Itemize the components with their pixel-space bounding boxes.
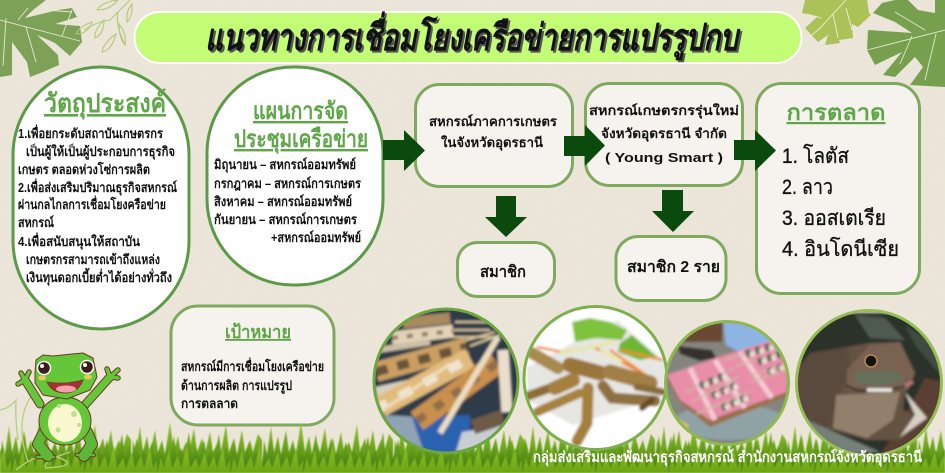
- panel: agricultural cooperatives: ในจังหวัดอุดรธานี: [441, 134, 543, 151]
- text block: objectives list: [18, 124, 177, 286]
- arrow: down to two members: [652, 190, 694, 232]
- decorative branch: top left: [76, 0, 132, 52]
- photo: frog skewers on pink mat: [665, 321, 790, 445]
- panel: agricultural cooperatives: [416, 84, 572, 186]
- photo: grilled frog skewers: [372, 308, 520, 455]
- text block: objectives list: 1.เพื่อยกระดับสถาบันเกษตรกร: [18, 124, 163, 141]
- title banner: แนวทางการเชื่อมโยงเครือข่ายการแปรรูปกบ: [205, 11, 741, 61]
- panel: Young Smart cooperative: จังหวัดอุดรธานี จำกัด: [601, 126, 727, 142]
- arrow: to marketing: [734, 130, 776, 171]
- panel: two members: สมาชิก 2 ราย: [627, 258, 720, 276]
- text block: objectives list: เป็นผู้ให้เป็นผู้ประกอบการธุรกิจ: [26, 142, 175, 160]
- heading: marketing: การตลาด: [786, 100, 886, 125]
- text block: monthly schedule: +สหกรณ์ออมทรัพย์: [271, 230, 361, 245]
- panel: two members: [616, 236, 726, 300]
- heading: meeting plan: [234, 98, 368, 155]
- text block: objectives list: เกษตรกรสามารถเข้าถึงแหล่ง: [26, 252, 160, 267]
- text block: goal: สหกรณ์มีการเชื่อมโยงเครือข่าย: [181, 357, 324, 374]
- arrow: to Young Smart cooperative: [564, 125, 605, 166]
- heading: meeting plan: แผนการจัด: [253, 98, 348, 125]
- list: markets: 1. โลตัส: [782, 144, 849, 168]
- text block: objectives list: เกษตร ตลอดห่วงโซ่การผลิต: [18, 161, 150, 177]
- decorative leaf: top right dark: [867, 0, 945, 87]
- panel: members: สมาชิก: [480, 263, 526, 281]
- title banner: [134, 11, 802, 63]
- heading: meeting plan: ประชุมเครือข่าย: [234, 126, 368, 155]
- list: markets: 4. อินโดนีเซีย: [782, 237, 899, 261]
- panel: Young Smart cooperative: [586, 84, 742, 186]
- panel: Young Smart cooperative: ( Young Smart ): [605, 150, 723, 165]
- photo: bullfrog: [795, 310, 943, 456]
- text block: monthly schedule: กรกฎาคม – สหกรณ์การเกษตร: [214, 176, 361, 192]
- list: markets: 2. ลาว: [782, 176, 833, 199]
- panel: goal: [171, 306, 334, 425]
- photo: fried frog plate: [524, 305, 668, 451]
- panel: marketing: [756, 84, 920, 294]
- text block: objectives list: 4.เพื่อสนับสนุนให้สถาบัน: [18, 232, 140, 250]
- grass: [0, 420, 945, 473]
- text block: monthly schedule: สิงหาคม – สหกรณ์ออมทรัพย์: [214, 194, 352, 209]
- text block: objectives list: เงินทุนดอกเบี้ยต่ำได้อย่างทั่วถึง: [26, 267, 172, 286]
- text block: objectives list: 2.เพื่อส่งเสริมปริมาณธุรกิจสหกรณ์: [18, 178, 177, 196]
- icon: frog mascot: [0, 353, 118, 470]
- panel: Young Smart cooperative: สหกรณ์เกษตรกรรุ่นใหม่: [589, 102, 739, 119]
- panel: objectives: [13, 67, 189, 329]
- panel: members: [458, 242, 554, 296]
- text block: goal: [181, 357, 324, 411]
- arrow: plan to agricultural cooperatives: [383, 130, 425, 171]
- text block: objectives list: ผ่านกลไกลการเชื่อมโยงครือข่าย: [18, 195, 166, 212]
- decorative leaf: top left monstera: [0, 0, 82, 77]
- heading: goal: เป้าหมาย: [225, 322, 291, 342]
- text block: goal: ด้านการผลิต การแปรรูป: [181, 378, 292, 394]
- arrow: down to members: [485, 196, 527, 237]
- text block: monthly schedule: มิถุนายน – สหกรณ์ออมทรัพย์: [214, 157, 356, 173]
- text block: objectives list: สหกรณ์: [18, 215, 54, 230]
- decorative leaf: top right light: [802, 0, 871, 45]
- panel: meeting plan: [207, 67, 383, 285]
- text block: monthly schedule: [214, 157, 361, 245]
- list: markets: 3. ออสเตเรีย: [782, 207, 886, 230]
- text block: monthly schedule: กันยายน – สหกรณ์การเกษตร: [214, 212, 357, 227]
- panel: agricultural cooperatives: สหกรณ์ภาคการเกษตร: [429, 114, 557, 129]
- text block: goal: การตลลาด: [181, 396, 238, 411]
- heading: objectives: วัตถุประสงค์: [44, 88, 166, 120]
- title banner: แนวทางการเชื่อมโยงเครือข่ายการแปรรูปกบ: [207, 13, 743, 63]
- list: markets: [782, 144, 899, 261]
